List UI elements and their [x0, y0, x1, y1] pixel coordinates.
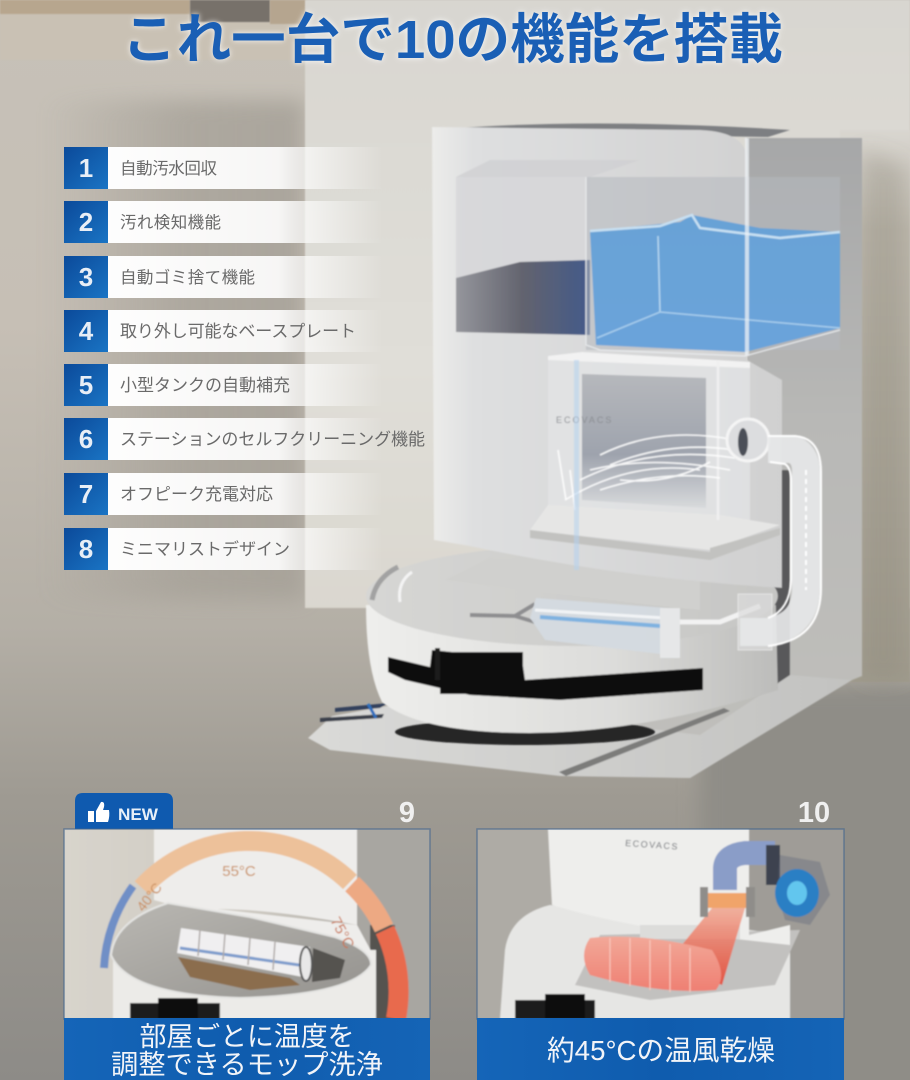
mop roller: [177, 928, 310, 978]
feature 2: [64, 201, 383, 243]
feature 4: [64, 310, 383, 352]
title: これ一台で10の機能を搭載: [122, 10, 783, 70]
caption 9: 部屋ごとに温度を: [140, 1022, 354, 1052]
station body: [548, 829, 790, 945]
robot logo Y: [470, 604, 535, 622]
dark inner column: [770, 470, 790, 700]
feature 5: 5: [79, 370, 93, 400]
feature 2: 汚れ検知機能: [120, 213, 221, 232]
robot window: [515, 1000, 595, 1019]
under-robot shadow: [395, 719, 655, 745]
caption 9: [64, 1018, 430, 1080]
feature 3: 自動ゴミ捨て機能: [120, 267, 255, 287]
new badge: [75, 793, 173, 829]
panel: temperature-adjustable mop wash: 40°C: [133, 880, 165, 914]
station front and tanks: [432, 123, 840, 588]
caption 10: 約45°Cの温風乾燥: [547, 1035, 775, 1066]
plate dark slot: [559, 708, 730, 776]
feature 6: 6: [79, 424, 93, 454]
brand mark: ECOVACS: [556, 415, 613, 425]
feature 6: [64, 418, 425, 460]
warm air beams: [668, 908, 745, 985]
icon: thumbs up: [88, 802, 109, 822]
new badge: NEW: [118, 805, 159, 824]
feature 6: ステーションのセルフクリーニング機能: [120, 430, 425, 449]
robot window: [130, 1003, 220, 1019]
feature 1: 1: [79, 153, 93, 183]
panel: temperature-adjustable mop wash: [64, 829, 430, 1080]
station body: [154, 829, 357, 925]
robot body side: [366, 605, 778, 733]
feature 7: オフピーク充電対応: [120, 485, 273, 504]
robot vacuum: [366, 546, 778, 745]
caption 9: 調整できるモップ洗浄: [111, 1050, 383, 1080]
robot top: [366, 546, 778, 646]
panel: warm air drying: [477, 829, 844, 1080]
vent: [708, 893, 746, 908]
water spray: [558, 435, 735, 510]
station lid: [460, 123, 790, 137]
station right side: [560, 138, 862, 778]
duct link to roller: [680, 606, 760, 622]
station front body: [432, 127, 782, 588]
clean water tank: [586, 138, 840, 356]
feature list: [64, 147, 425, 570]
duct joint box: [738, 594, 772, 650]
number 9: 9: [399, 797, 415, 829]
feature 5: 小型タンクの自動補充: [120, 376, 290, 395]
cleaning tank: [530, 352, 780, 560]
blue fan: [778, 855, 830, 925]
heated roller: [584, 936, 721, 991]
feature 3: 3: [79, 262, 93, 292]
feature 7: [64, 473, 383, 515]
station back and base: [308, 138, 905, 778]
feature 4: 取り外し可能なベースプレート: [120, 322, 356, 341]
station shadow on wall: [862, 150, 905, 680]
robot body: [500, 905, 790, 1019]
mop roller and drying duct: [530, 419, 821, 658]
base plate: [308, 675, 852, 778]
plate brushes: [335, 703, 388, 712]
feature 1: 自動汚水回収: [120, 159, 218, 178]
feature 1: [64, 147, 383, 189]
washing tray disc: [111, 903, 371, 998]
duct pipe: [727, 419, 821, 646]
feature 3: [64, 256, 383, 298]
blue light beam: [574, 360, 579, 570]
title: これ一台で10の機能を搭載: [122, 10, 783, 70]
feature 2: 2: [79, 207, 93, 237]
blower pipe: [725, 853, 775, 890]
debris: [178, 957, 300, 990]
white wedge: [165, 903, 376, 960]
caption 10: [477, 1018, 844, 1080]
number 10: 10: [798, 797, 830, 829]
brand mark: ECOVACS: [625, 838, 679, 852]
mop roller: [530, 598, 680, 658]
feature 8: [64, 528, 383, 570]
temperature arc: [104, 841, 399, 1019]
feature 5: [64, 364, 383, 406]
temperature labels: 55°C: [222, 863, 256, 880]
dirty water tank: [456, 160, 640, 335]
robot window: [388, 650, 703, 700]
feature 8: 8: [79, 534, 93, 564]
panel: temperature-adjustable mop wash: 75°C: [327, 914, 357, 952]
robot body: [113, 950, 376, 1019]
feature 7: 7: [79, 479, 93, 509]
feature 4: 4: [79, 316, 94, 346]
feature 8: ミニマリストデザイン: [120, 539, 290, 559]
